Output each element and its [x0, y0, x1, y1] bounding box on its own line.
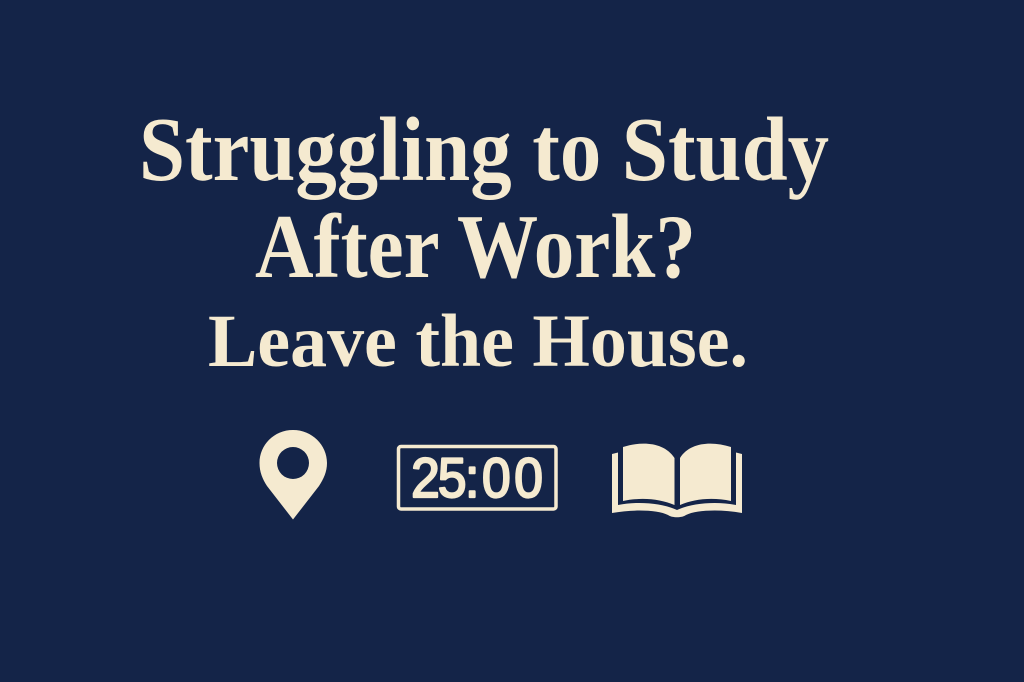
heading line 2: After Work?	[255, 196, 696, 297]
book cover	[612, 452, 742, 517]
heading line 3: call to action: Leave the House.	[208, 300, 748, 383]
heading line 1: Struggling to Study	[139, 99, 829, 200]
right page	[680, 444, 731, 505]
timer digits: 25:00	[411, 447, 543, 509]
icon: location pin	[260, 430, 327, 520]
icon: pomodoro timer	[398, 446, 556, 509]
title	[139, 99, 829, 383]
icon: open book	[612, 444, 742, 517]
left page	[623, 444, 674, 505]
